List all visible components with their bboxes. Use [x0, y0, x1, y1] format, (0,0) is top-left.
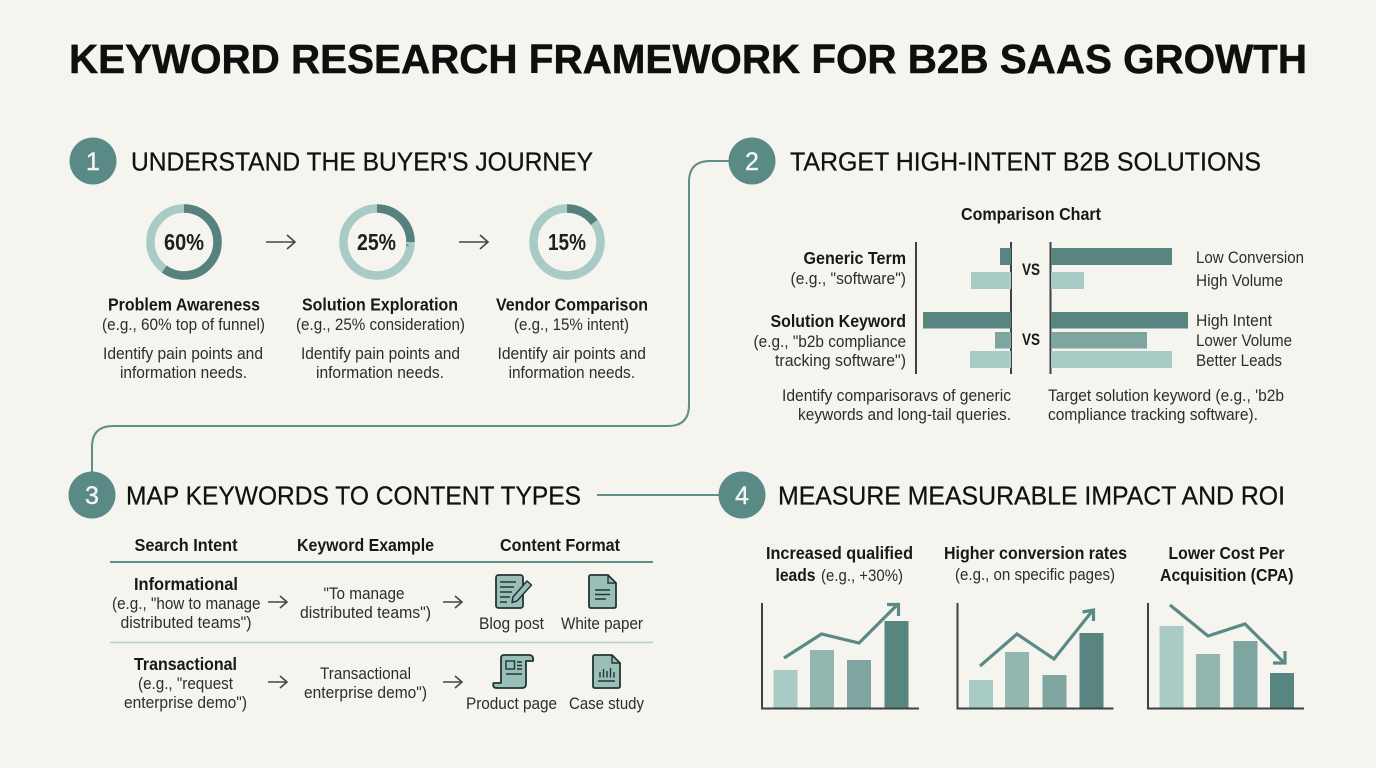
right labels — [1196, 248, 1304, 370]
stage text: solution exploration — [296, 294, 465, 382]
vs markers: VS — [1022, 260, 1040, 279]
stage text: solution exploration: (e.g., 25% consideration) — [296, 315, 465, 334]
arrow — [266, 235, 295, 249]
panel: understand the buyer's journey — [70, 138, 648, 382]
panel: target high-intent b2b solutions — [728, 138, 1304, 424]
connector: step 3 to step 4 — [597, 494, 720, 496]
keyword example: Transactional — [320, 664, 411, 683]
step 4 badge: 4 — [735, 482, 749, 510]
donut: 15%: 15% — [548, 229, 586, 255]
keyword example: distributed teams") — [300, 603, 431, 622]
metric label: conversion rates: (e.g., on specific pages) — [955, 565, 1115, 584]
stage text: problem awareness — [102, 294, 265, 382]
left labels: Generic Term — [804, 248, 906, 268]
label: product page: Product page — [466, 694, 557, 713]
stage text: problem awareness: Problem Awareness — [108, 294, 260, 314]
axis lines — [916, 242, 1050, 374]
metric label: cost per acquisition — [1160, 543, 1294, 585]
stage text: problem awareness: (e.g., 60% top of funnel) — [102, 315, 265, 334]
donut: 60% — [150, 208, 218, 276]
chart: conversion rising — [958, 603, 1114, 708]
note: solution keyword: compliance tracking software). — [1048, 405, 1258, 424]
stage text: vendor comparison: (e.g., 15% intent) — [514, 315, 629, 334]
right labels: Better Leads — [1196, 351, 1282, 370]
step 1 badge — [70, 138, 116, 184]
arrow — [268, 676, 287, 688]
left bars — [923, 248, 1011, 368]
heading 2: TARGET HIGH-INTENT B2B SOLUTIONS — [790, 146, 1261, 176]
metric label: cost per acquisition: Lower Cost Per — [1168, 543, 1285, 563]
metric label: qualified leads — [766, 543, 913, 585]
chart title: Comparison Chart — [961, 204, 1101, 224]
keyword example — [300, 584, 431, 622]
right labels: High Volume — [1196, 271, 1283, 290]
step 3 badge — [68, 472, 116, 518]
intent text: enterprise demo") — [124, 693, 247, 712]
label: blog post: Blog post — [479, 614, 544, 633]
arrow — [268, 596, 287, 608]
stage text: problem awareness: information needs. — [120, 363, 247, 382]
heading 1: UNDERSTAND THE BUYER'S JOURNEY — [131, 146, 593, 176]
metric label: conversion rates: Higher conversion rates — [944, 543, 1127, 563]
stage text: solution exploration: Identify pain points and — [301, 344, 460, 363]
keyword example: enterprise demo") — [304, 683, 427, 702]
intent text: Transactional — [134, 654, 237, 674]
left labels: (e.g., "b2b compliance — [754, 332, 906, 351]
icon: product page — [493, 655, 533, 688]
stage text: vendor comparison: information needs. — [509, 363, 635, 382]
heading 4: MEASURE MEASURABLE IMPACT AND ROI — [778, 480, 1285, 510]
donut: 60%: 60% — [164, 229, 204, 255]
donut: 25%: 25% — [357, 229, 396, 255]
icon: white paper — [589, 575, 616, 608]
intent text: Informational — [134, 574, 238, 594]
metric label: qualified leads: leads — [776, 565, 816, 585]
note: generic keywords — [782, 386, 1011, 424]
right labels: Lower Volume — [1196, 331, 1292, 350]
metric label: qualified leads: Increased qualified — [766, 543, 913, 563]
table header: Keyword Example — [297, 535, 434, 555]
metric label: cost per acquisition: Acquisition (CPA) — [1160, 565, 1294, 585]
chart: leads rising — [762, 603, 919, 708]
stage text: vendor comparison: Vendor Comparison — [496, 294, 648, 314]
metric label: conversion rates — [944, 543, 1127, 584]
right bars — [1051, 248, 1188, 368]
label: case study: Case study — [569, 694, 644, 713]
table header: Content Format — [500, 535, 620, 555]
table header — [134, 535, 620, 555]
stage text: vendor comparison: Identify air points and — [498, 344, 646, 363]
icon: case study — [593, 655, 620, 688]
step 1 badge: 1 — [86, 148, 100, 176]
stage text: problem awareness: Identify pain points and — [103, 344, 263, 363]
intent text: distributed teams") — [120, 613, 252, 632]
donut: 15% — [534, 208, 600, 276]
step 3 badge: 3 — [85, 482, 99, 510]
right labels: Low Conversion — [1196, 248, 1304, 267]
icon: blog post — [496, 575, 532, 608]
intent text: (e.g., "how to manage — [112, 594, 260, 613]
heading 3: MAP KEYWORDS TO CONTENT TYPES — [126, 480, 581, 510]
arrow — [459, 235, 488, 249]
vs markers: VS — [1022, 330, 1040, 349]
chart: cpa falling — [1148, 603, 1304, 708]
metric label: qualified leads: (e.g., +30%) — [821, 566, 903, 585]
title: KEYWORD RESEARCH FRAMEWORK FOR B2B SAAS GROWTH — [69, 36, 1307, 82]
intent text: (e.g., "request — [138, 674, 233, 693]
arrow — [443, 596, 462, 608]
left labels — [754, 248, 906, 370]
panel: measure impact and roi — [718, 472, 1304, 708]
note: generic keywords: Identify comparisoravs of generic — [782, 386, 1011, 405]
donut: 25% — [344, 208, 410, 276]
stage text: solution exploration: information needs. — [316, 363, 444, 382]
table header: Search Intent — [134, 535, 238, 555]
arrow — [443, 676, 462, 688]
vs markers — [1022, 260, 1040, 349]
panel: map keywords to content types — [68, 472, 653, 713]
row: informational — [112, 574, 643, 633]
stage text: solution exploration: Solution Exploration — [302, 294, 458, 314]
step 2 badge: 2 — [745, 148, 759, 176]
left labels: (e.g., "software") — [790, 269, 906, 288]
keyword example — [304, 664, 427, 702]
connector: step 2 to step 3 — [92, 161, 730, 473]
intent text — [112, 574, 260, 632]
comparison chart — [754, 204, 1304, 374]
note: solution keyword — [1048, 386, 1284, 424]
label: white paper: White paper — [561, 614, 643, 633]
right labels: High Intent — [1196, 311, 1272, 330]
note: generic keywords: keywords and long-tail queries. — [798, 405, 1011, 424]
step 2 badge — [728, 138, 776, 184]
left labels: tracking software") — [775, 351, 906, 370]
row: transactional — [124, 654, 644, 713]
stage text: vendor comparison — [496, 294, 648, 382]
intent text — [124, 654, 247, 712]
note: solution keyword: Target solution keyword (e.g., 'b2b — [1048, 386, 1284, 405]
keyword example: "To manage — [324, 584, 404, 603]
left labels: Solution Keyword — [770, 311, 906, 331]
step 4 badge — [718, 472, 766, 518]
